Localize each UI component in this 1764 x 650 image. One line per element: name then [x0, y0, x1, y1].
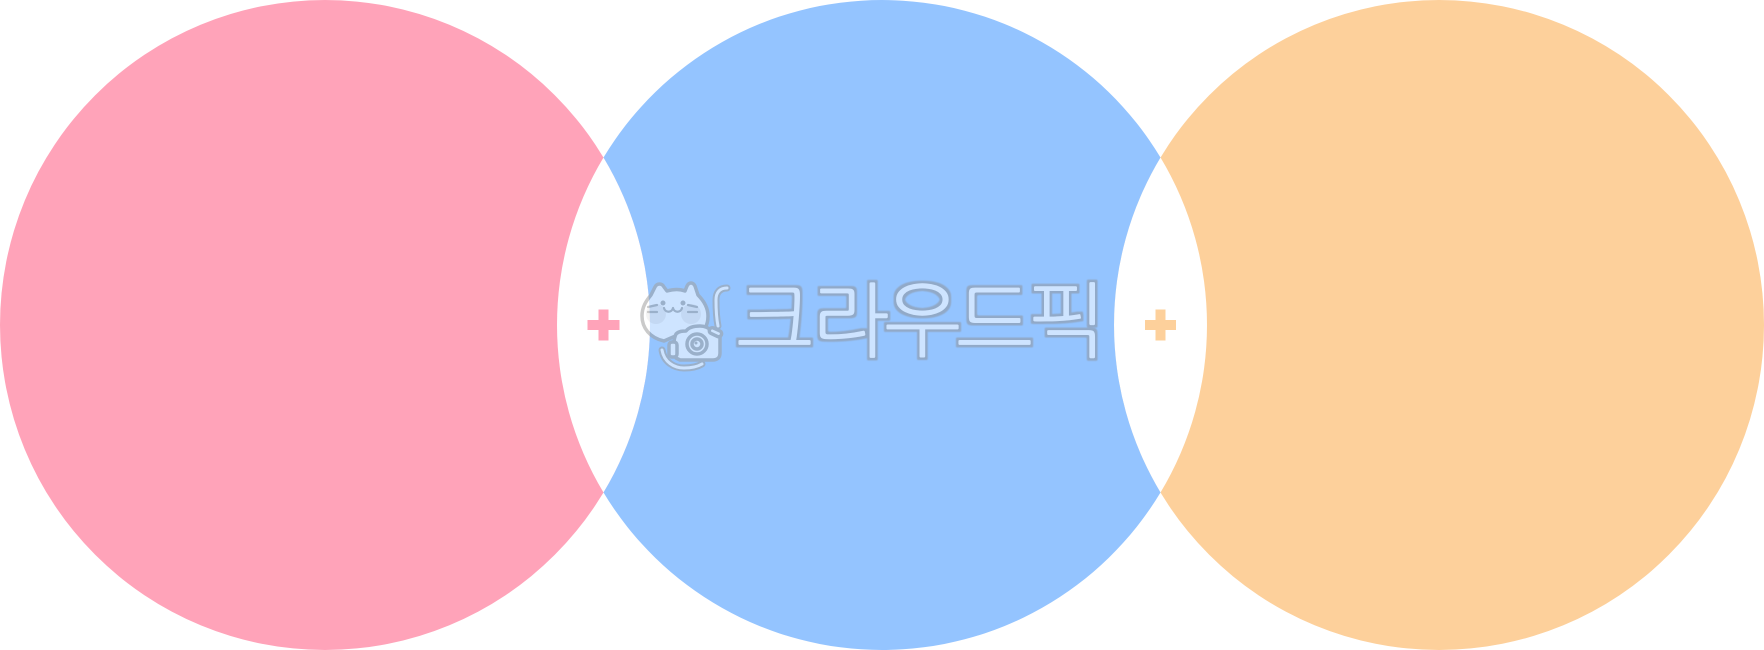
watermark text: 크라우드픽	[736, 280, 1106, 362]
circle: pink	[0, 0, 650, 650]
lens cutouts: white overlaps	[557, 158, 1207, 492]
watermark logo	[642, 280, 1106, 368]
icon: pink plus	[588, 310, 620, 340]
circle: blue	[604, 0, 1160, 650]
cat head	[642, 283, 708, 341]
circle: orange	[1114, 0, 1764, 650]
cat cheeks	[646, 304, 701, 324]
camera lens	[687, 334, 707, 354]
cat face	[648, 302, 697, 312]
cat body arc	[662, 350, 702, 368]
icon: orange plus	[1145, 310, 1176, 340]
camera body	[674, 326, 720, 360]
camera grip	[669, 342, 677, 357]
camera strap nub	[708, 327, 723, 338]
cat tail	[716, 288, 727, 326]
icon: cat with camera	[642, 283, 727, 368]
